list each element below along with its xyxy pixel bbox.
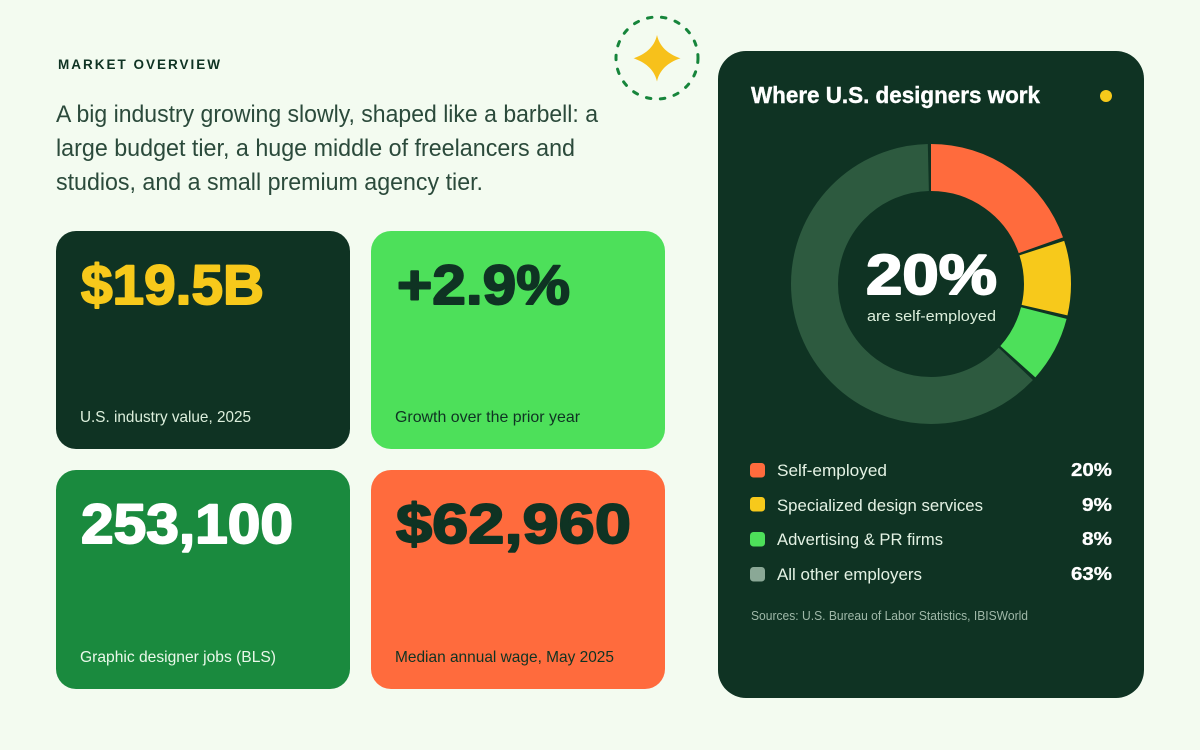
legend row: self-employed: Self-employed (777, 462, 887, 480)
stat card: median wage: Median annual wage, May 2025 (395, 649, 614, 666)
legend row: specialized design services: 9% (1082, 494, 1112, 515)
legend row: all other employers: 63% (1071, 563, 1112, 584)
stat card: designer jobs (56, 470, 350, 689)
legend row: all other employers (750, 563, 1112, 584)
legend row: self-employed: 20% (1071, 459, 1112, 480)
intro text block (56, 101, 599, 196)
icon: sparkle in dashed circle (616, 17, 698, 99)
legend row: specialized design services: Specialized design services (777, 497, 983, 515)
legend row: advertising and PR firms (750, 528, 1112, 549)
stat card: median wage (371, 470, 665, 689)
stat card: industry value: $19.5B (81, 253, 264, 316)
stat card: industry value (56, 231, 350, 449)
legend (750, 459, 1112, 584)
donut centre value: 20% (866, 243, 997, 307)
stat card: median wage: $62,960 (396, 492, 631, 555)
legend row: all other employers: All other employers (777, 566, 922, 584)
sources note: Sources: U.S. Bureau of Labor Statistics, IBISWorld (751, 609, 1028, 623)
panel: where designers work (718, 51, 1144, 698)
donut chart (814, 168, 1048, 400)
legend row: self-employed (750, 459, 1112, 480)
stat card: growth: Growth over the prior year (395, 409, 581, 426)
stat card: industry value: U.S. industry value, 2025 (80, 409, 251, 426)
intro text block: large budget tier, a huge middle of freelancers and (56, 135, 575, 162)
panel title: Where U.S. designers work (751, 82, 1040, 108)
legend row: advertising and PR firms: 8% (1082, 528, 1112, 549)
stat card: designer jobs: 253,100 (81, 492, 293, 555)
legend row: specialized design services (750, 494, 1112, 515)
stat card: designer jobs: Graphic designer jobs (BLS) (80, 649, 276, 666)
eyebrow heading: MARKET OVERVIEW (58, 57, 220, 72)
donut centre caption: are self-employed (867, 308, 996, 325)
legend row: advertising and PR firms: Advertising & PR firms (777, 531, 943, 549)
intro text block: A big industry growing slowly, shaped like a barbell: a (56, 101, 599, 128)
stat card: growth (371, 231, 665, 449)
stat card: growth: +2.9% (397, 253, 570, 316)
intro text block: studios, and a small premium agency tier. (56, 169, 483, 196)
icon: yellow dot (1100, 90, 1112, 102)
